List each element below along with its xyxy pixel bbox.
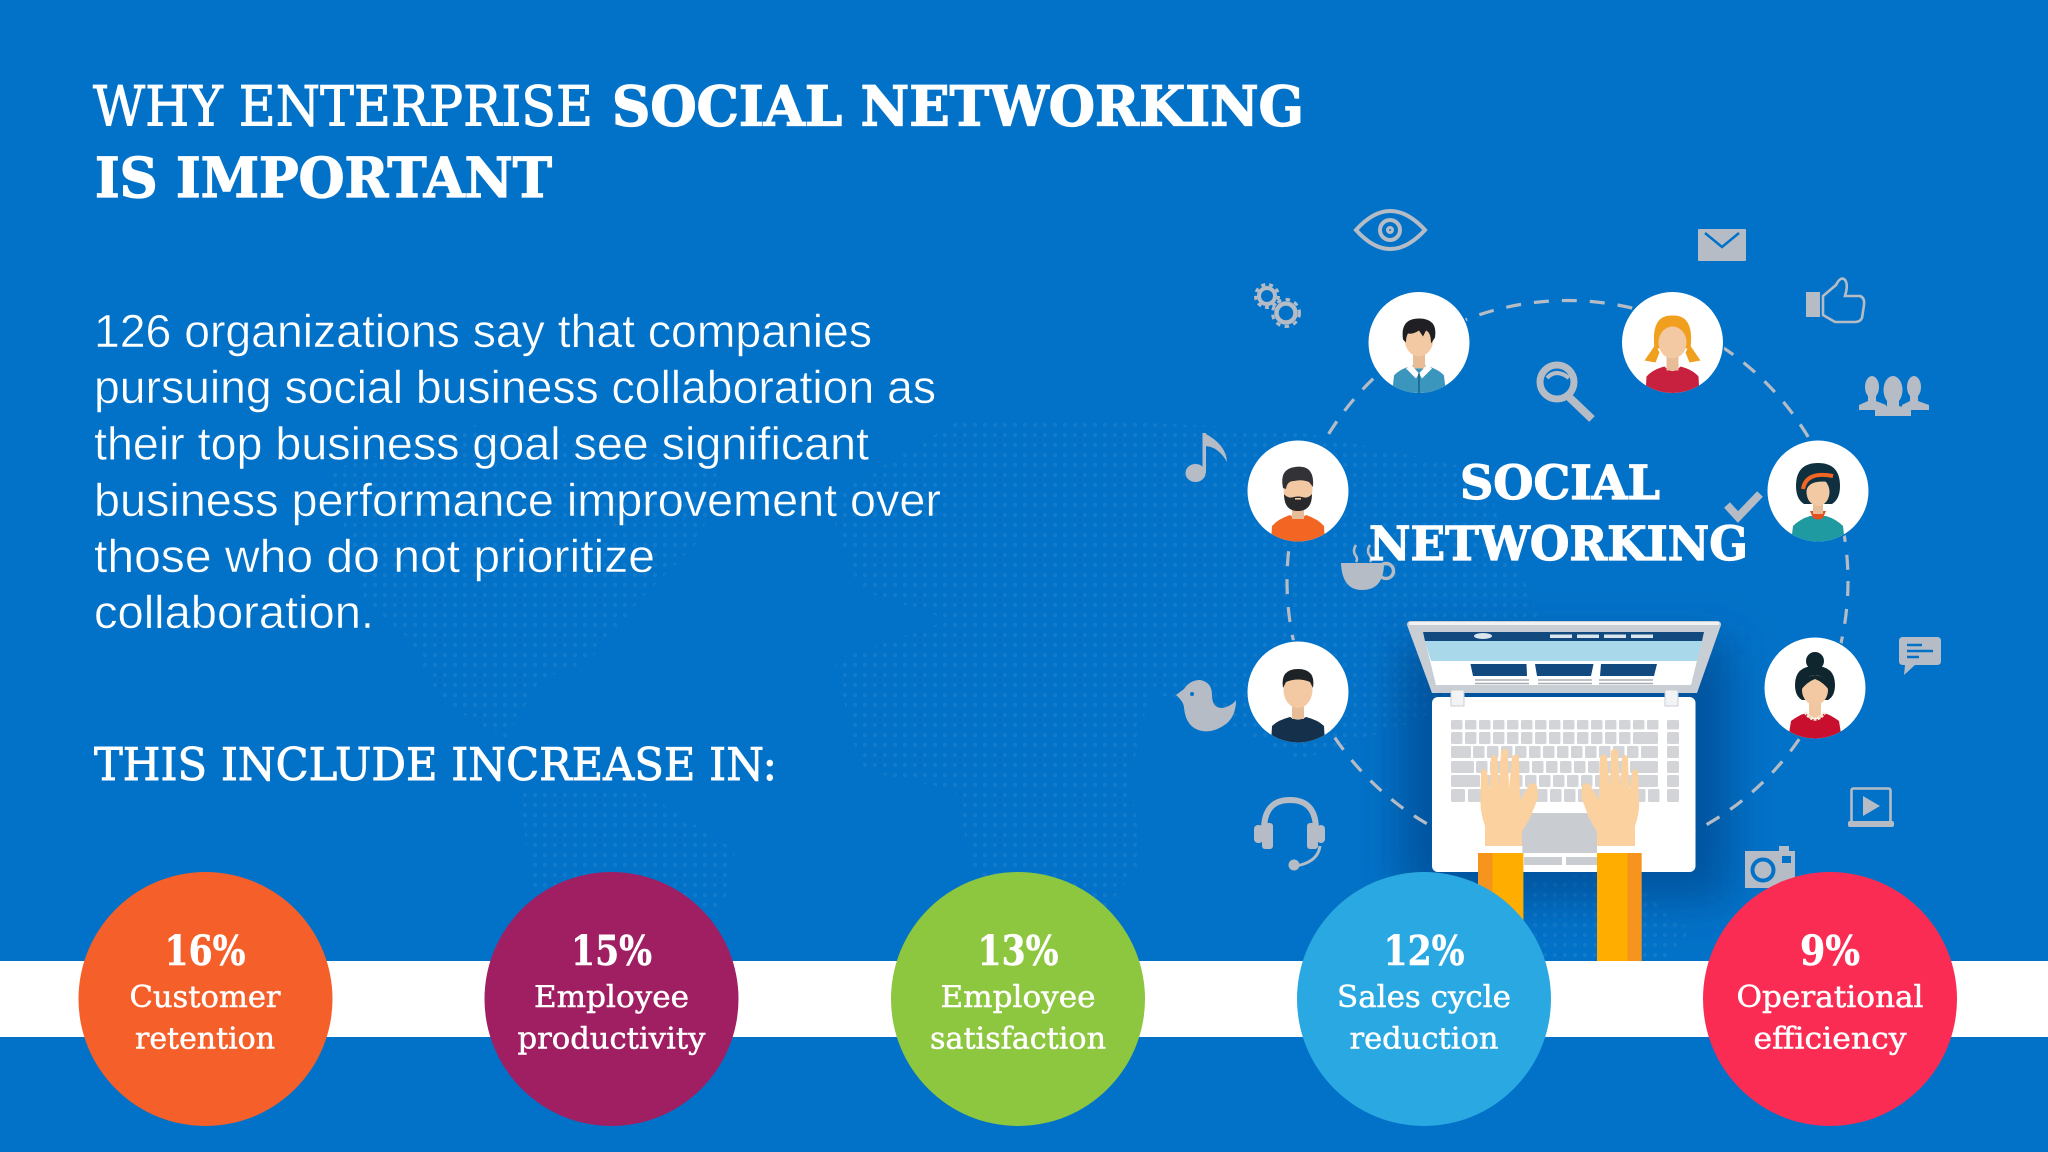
body paragraph: 126 organizations say that companies <box>94 305 872 357</box>
stat: customer retention: 16% <box>164 927 246 975</box>
stat: employee productivity: Employee <box>534 980 689 1015</box>
stat: operational efficiency <box>1703 872 1957 1126</box>
laptop illustration <box>1407 621 1721 961</box>
left hand <box>1480 749 1538 846</box>
title <box>93 74 1304 210</box>
stat: employee productivity <box>484 872 738 1126</box>
stat: employee productivity: 15% <box>571 927 652 975</box>
icon: magnifier <box>1540 365 1592 419</box>
icon: check mark <box>1727 494 1760 517</box>
stat: sales cycle reduction: reduction <box>1350 1022 1498 1056</box>
stat: sales cycle reduction: 12% <box>1384 927 1464 975</box>
icon: coffee cup <box>1341 545 1394 590</box>
stat: customer retention: retention <box>135 1022 275 1056</box>
hinges <box>1451 690 1678 706</box>
stat: customer retention <box>78 872 332 1126</box>
subheading: THIS INCLUDE INCREASE IN: <box>94 738 777 791</box>
center heading: social networking: SOCIAL <box>1460 456 1660 511</box>
avatar: woman with bun and pearls <box>1763 636 1867 740</box>
stat: employee productivity: productivity <box>518 1022 706 1056</box>
title: SOCIAL NETWORKING <box>612 74 1304 138</box>
laptop base <box>1432 697 1696 872</box>
stat: operational efficiency: 9% <box>1800 927 1860 975</box>
avatar: man in navy shirt <box>1246 640 1350 744</box>
avatar: woman with orange headband <box>1766 439 1870 543</box>
icon: gears <box>1256 284 1300 326</box>
avatar: blonde woman in red <box>1620 290 1724 394</box>
body paragraph: collaboration. <box>94 586 374 638</box>
icon: envelope <box>1698 229 1746 261</box>
trackpad <box>1522 813 1602 865</box>
icon: chat bubble <box>1899 637 1941 675</box>
stat: sales cycle reduction: Sales cycle <box>1337 980 1511 1015</box>
body paragraph: business performance improvement over <box>94 474 941 526</box>
stat: customer retention: Customer <box>130 980 281 1015</box>
avatar: bearded man in orange <box>1246 439 1350 543</box>
icon: video player <box>1848 788 1894 827</box>
body paragraph: those who do not prioritize <box>94 530 655 582</box>
title: IS IMPORTANT <box>95 145 552 210</box>
dashed network ring <box>1287 300 1848 862</box>
stat: employee satisfaction: 13% <box>978 927 1058 975</box>
icon: people <box>1859 376 1929 416</box>
icon: camera <box>1745 846 1795 888</box>
right sleeve <box>1597 846 1642 961</box>
white band <box>0 961 2048 1037</box>
right hand <box>1582 749 1639 846</box>
stat: employee satisfaction: satisfaction <box>930 1022 1106 1056</box>
body paragraph: pursuing social business collaboration as <box>94 361 936 413</box>
stat: employee satisfaction: Employee <box>940 980 1096 1015</box>
stat: operational efficiency: Operational <box>1736 980 1924 1015</box>
title: WHY ENTERPRISE <box>93 74 593 138</box>
laptop shadow <box>1400 640 1730 900</box>
center heading: social networking: NETWORKING <box>1369 517 1748 572</box>
center heading: social networking <box>1369 456 1748 572</box>
avatar: man in blue shirt <box>1367 290 1471 394</box>
stat: employee satisfaction <box>891 872 1145 1126</box>
body paragraph: their top business goal see significant <box>94 418 869 470</box>
keyboard <box>1451 720 1679 802</box>
icon: eye <box>1356 211 1425 249</box>
body paragraph <box>94 305 941 638</box>
icon: music note <box>1186 433 1227 482</box>
icon: bird <box>1176 680 1236 731</box>
icon: thumbs up <box>1806 279 1864 322</box>
world map dot pattern <box>330 420 1690 1060</box>
left sleeve <box>1478 846 1523 961</box>
stat: sales cycle reduction <box>1297 872 1551 1126</box>
stat: operational efficiency: efficiency <box>1754 1022 1907 1056</box>
icon: headset <box>1254 800 1325 870</box>
laptop screen <box>1407 621 1721 693</box>
